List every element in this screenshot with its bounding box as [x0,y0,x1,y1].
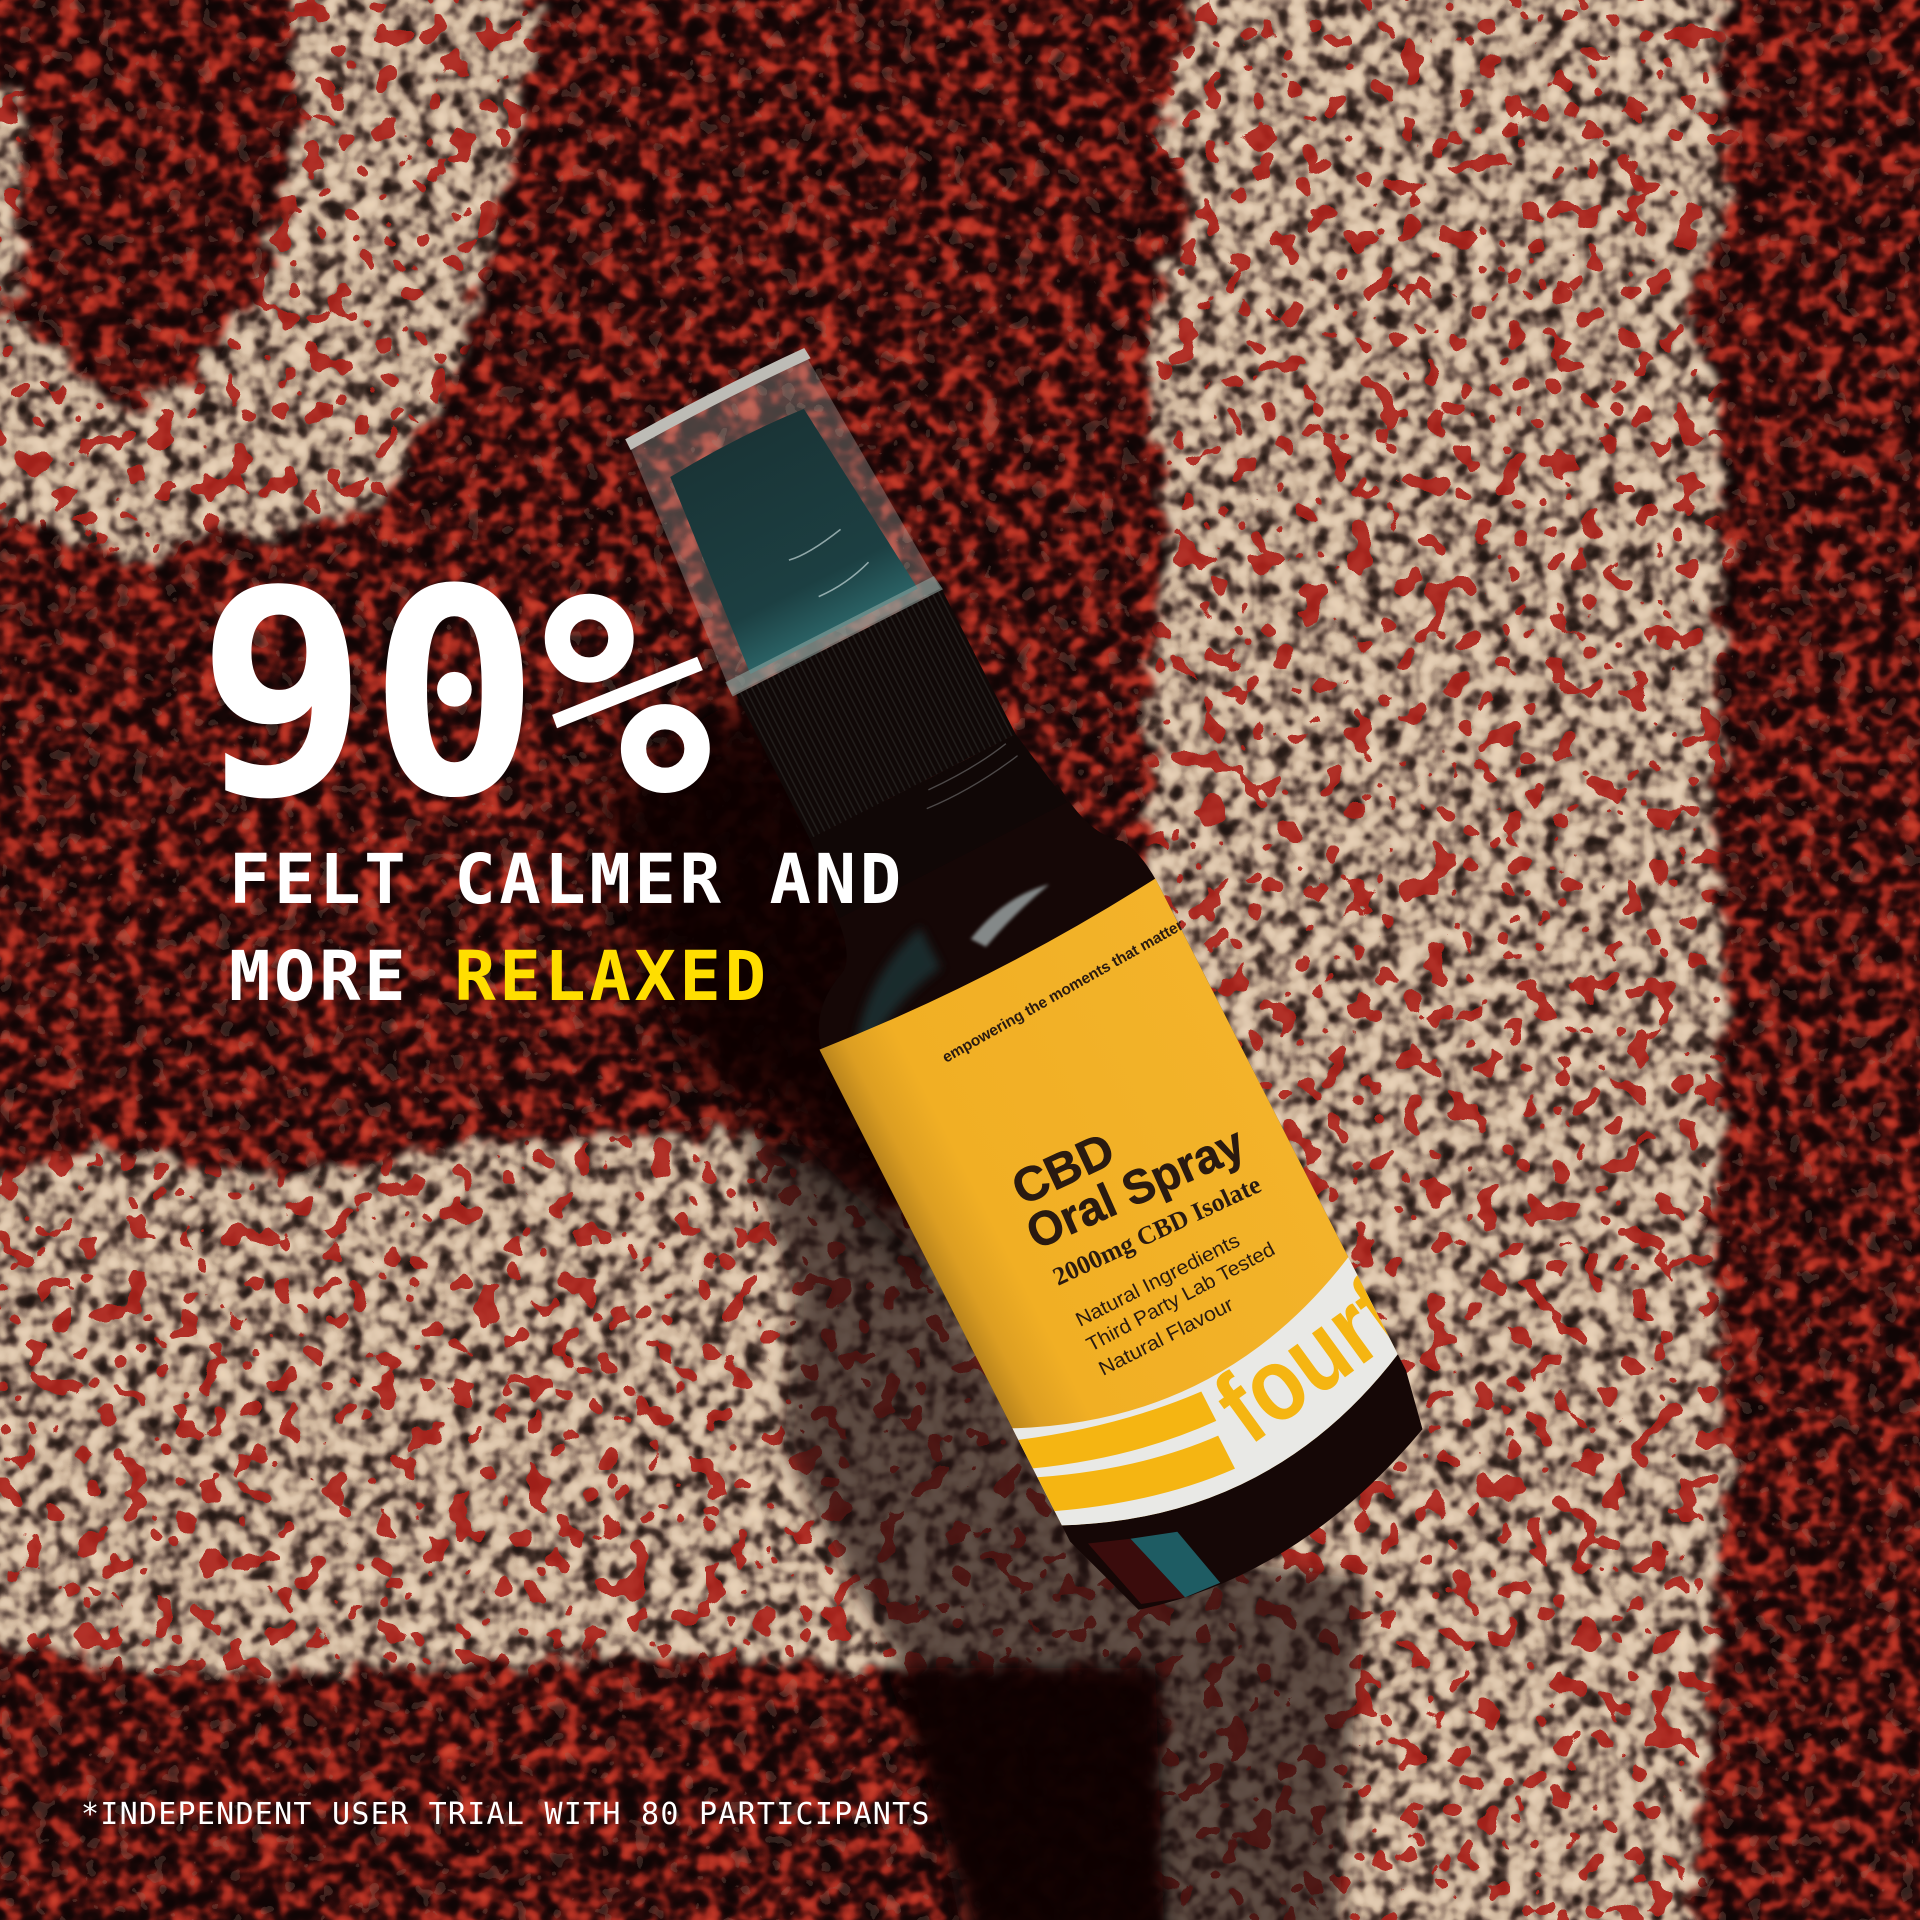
teal liquid reflection at base [1130,1512,1220,1610]
brand wordmark: fourfi [1195,1241,1443,1465]
shoulder sheen [822,928,959,1053]
product name line 2: Oral Spray [1019,1117,1253,1260]
benefit 2: Third Party Lab Tested [1083,1238,1279,1356]
label text [940,917,1279,1380]
tagline: empowering the moments that matter [940,917,1186,1066]
product name line 1: CBD [1004,1123,1123,1216]
side label print [874,1153,990,1380]
headline line 2: MORE RELAXED [229,937,770,1017]
bottle cast shadow [600,690,1365,1920]
strength: 2000mg CBD Isolate [1048,1170,1265,1291]
yellow stripes [1018,1356,1239,1550]
cap rim [624,346,811,450]
inner spray pump [653,397,918,674]
pump glints [787,525,872,601]
label [820,878,1398,1526]
footnote: *INDEPENDENT USER TRIAL WITH 80 PARTICIPANTS [81,1797,931,1832]
collar lower ring [801,727,1067,918]
collar glints [917,741,1021,810]
bottle body [761,764,1455,1637]
ribbed collar [736,590,1016,839]
transparent cap [609,348,940,695]
benefit 3: Natural Flavour [1095,1293,1237,1380]
product: CBD oral spray bottle [532,291,1498,1637]
white band [1012,1257,1418,1566]
headline statistic: 90% [197,529,714,861]
red reflection at base [1088,1515,1185,1626]
shoulder highlight [963,881,1062,951]
headline line 1: FELT CALMER AND [229,840,905,920]
cap base ring [725,575,943,697]
benefit 1: Natural Ingredients [1072,1230,1244,1331]
